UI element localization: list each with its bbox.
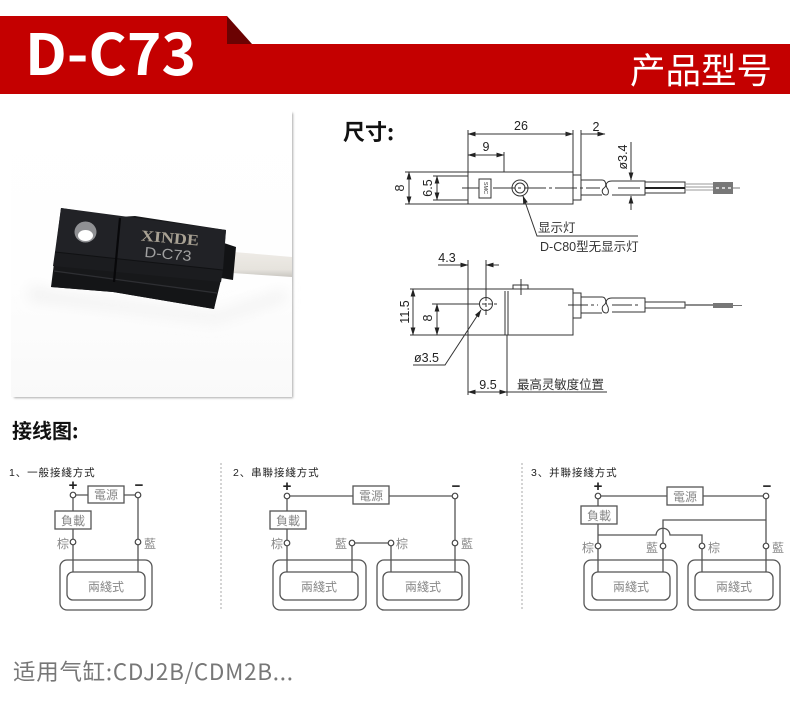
heading: wiring diagram: 接线图: <box>12 415 78 444</box>
dimension diameter 3.4: ø3.4 <box>616 144 630 170</box>
hole callout: ø3.5 <box>414 351 439 365</box>
dimension 8: 8 <box>421 314 435 321</box>
wires <box>287 496 455 572</box>
load box: 負載 <box>587 507 611 524</box>
ribbon fold <box>227 16 252 44</box>
brand marking: XINDE <box>140 228 200 249</box>
title: 2、串聯接綫方式 <box>233 466 320 479</box>
dimension 26 <box>468 119 573 134</box>
polarity marks: + <box>283 478 292 495</box>
two-wire sensor right <box>688 560 780 610</box>
two-wire sensor <box>60 560 152 610</box>
load box: 負載 <box>276 512 300 529</box>
footer: applicable cylinders: 适用气缸:CDJ2B/CDM2B... <box>13 655 293 687</box>
power box <box>88 486 124 503</box>
dimension 2: 2 <box>593 120 600 134</box>
terminals: 棕 <box>396 535 408 552</box>
two-wire sensor right: 兩綫式 <box>716 578 752 595</box>
wire ends <box>713 303 742 308</box>
model marking: D-C73 <box>144 245 192 265</box>
cable tab <box>221 243 236 280</box>
polarity marks <box>594 478 772 495</box>
polarity marks: + <box>594 478 603 495</box>
dimension 26: 26 <box>514 119 528 133</box>
dimension 8: 8 <box>393 184 407 191</box>
terminals: 藍 <box>772 539 784 556</box>
dimension 9 <box>468 140 504 172</box>
wiring diagram 3: parallel <box>531 466 784 610</box>
dimension 9: 9 <box>483 140 490 154</box>
sensor outline <box>410 260 713 396</box>
sensor outline <box>405 130 713 204</box>
polarity marks: + <box>69 477 78 494</box>
dimension drawing: top view <box>393 119 740 254</box>
wire ends <box>713 182 740 194</box>
power box <box>667 487 703 505</box>
dimension 8 <box>421 304 437 335</box>
two-wire sensor: 兩綫式 <box>88 578 124 595</box>
terminals <box>57 492 156 552</box>
hole callout <box>413 310 481 365</box>
terminals: 棕 <box>582 539 594 556</box>
terminals: 棕 <box>57 535 69 552</box>
power box: 電源 <box>359 487 383 504</box>
sensor shadow <box>30 285 285 322</box>
polarity marks: − <box>135 477 144 494</box>
dimension drawing: side view <box>398 251 742 396</box>
dimension 6.5 <box>421 176 437 200</box>
sensitivity position note: 最高灵敏度位置 <box>517 374 604 393</box>
wires <box>73 495 138 572</box>
dimension 9.5 <box>468 378 507 392</box>
terminals: 藍 <box>646 539 658 556</box>
terminals <box>582 493 784 556</box>
sensor body <box>51 208 226 309</box>
two-wire sensor left: 兩綫式 <box>613 578 649 595</box>
dimension 8 <box>393 172 409 204</box>
polarity marks <box>283 478 461 495</box>
two-wire sensor right <box>377 560 469 610</box>
header banner <box>0 10 790 94</box>
load box <box>581 506 617 524</box>
title: 1、一般接綫方式 <box>9 466 96 479</box>
red ribbon <box>0 16 790 94</box>
indicator callout <box>523 196 639 254</box>
product model title: D-C73 <box>25 10 196 92</box>
indicator callout: D-C80型无显示灯 <box>540 240 639 254</box>
power box <box>353 486 389 504</box>
product model label: 产品型号 <box>630 43 772 94</box>
polarity marks: − <box>452 478 461 495</box>
dimension diameter 3.4 <box>616 142 631 210</box>
dimension 9.5: 9.5 <box>479 378 497 392</box>
wires <box>598 496 766 572</box>
title: 3、并聯接綫方式 <box>531 466 618 479</box>
dimension 4.3 <box>438 251 499 265</box>
dimension 6.5: 6.5 <box>421 179 435 197</box>
polarity marks: − <box>763 478 772 495</box>
dimension 11.5 <box>398 289 413 335</box>
dimension 2 <box>566 120 605 134</box>
terminals: 棕 <box>271 535 283 552</box>
two-wire sensor left <box>584 560 677 610</box>
terminals: 藍 <box>335 535 347 552</box>
mounting hole <box>74 222 96 242</box>
terminals: 棕 <box>708 539 720 556</box>
dimension drawing: top view: SMC <box>482 182 488 194</box>
two-wire sensor right: 兩綫式 <box>405 578 441 595</box>
load box <box>55 511 91 529</box>
load box <box>270 511 306 529</box>
wiring diagram 2: series <box>233 466 473 610</box>
two-wire sensor left: 兩綫式 <box>301 578 337 595</box>
wiring diagram 1: general <box>9 466 156 610</box>
dimension 11.5: 11.5 <box>398 300 412 324</box>
terminals <box>271 493 473 552</box>
divider <box>221 463 522 610</box>
indicator callout: 显示灯 <box>538 217 576 236</box>
terminals: 藍 <box>461 535 473 552</box>
terminals: 藍 <box>144 535 156 552</box>
polarity marks <box>69 477 144 494</box>
cable <box>232 252 292 277</box>
load box: 負載 <box>61 512 85 529</box>
product photo <box>11 110 293 398</box>
power box: 電源 <box>673 488 697 505</box>
dimension 4.3: 4.3 <box>438 251 456 265</box>
heading: dimensions: 尺寸: <box>343 115 394 147</box>
two-wire sensor left <box>273 560 366 610</box>
power box: 電源 <box>94 486 118 503</box>
